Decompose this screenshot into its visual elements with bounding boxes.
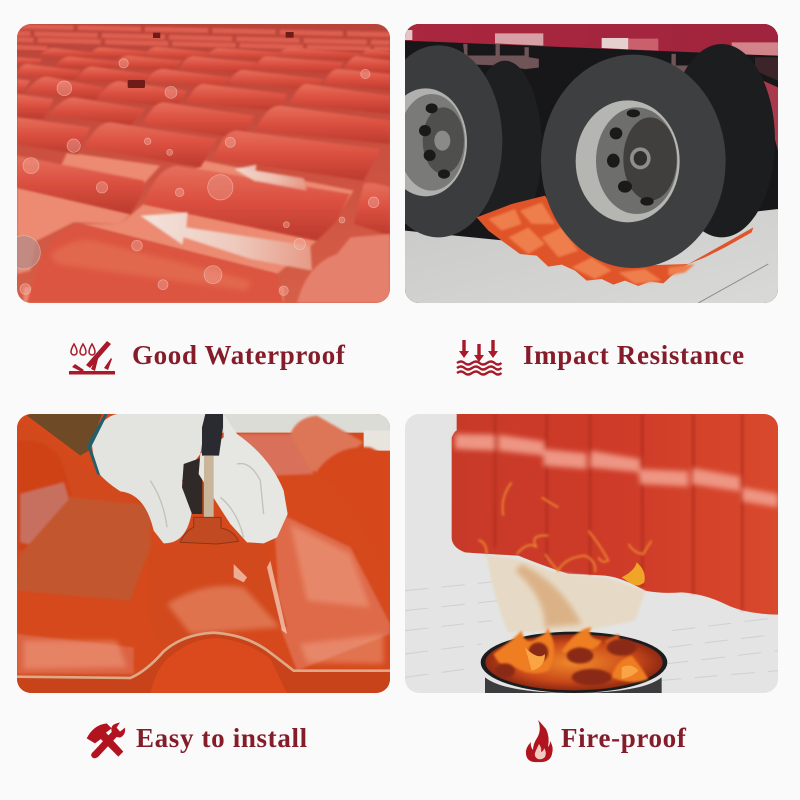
rear tyres — [493, 60, 520, 68]
crushed roof sheet — [477, 196, 753, 286]
ridge screws — [128, 32, 294, 88]
concrete floor — [405, 209, 778, 303]
bottom barrel tile — [27, 224, 284, 303]
icon: hammer and wrench — [87, 722, 125, 758]
light flat tile channels — [17, 152, 354, 303]
burning barrel — [481, 624, 667, 693]
roof tile barrels — [17, 47, 390, 241]
glossy speckle patches — [24, 524, 384, 669]
floor lines — [405, 581, 778, 681]
far tile rows — [0, 26, 390, 49]
water drops — [7, 59, 379, 295]
icon: flame — [526, 720, 553, 762]
left tyre — [405, 46, 502, 238]
label: Easy to install: Easy to install — [136, 723, 308, 753]
panel: waterproof roof photo — [0, 24, 390, 303]
roof surfaces — [17, 416, 390, 674]
label: Impact Resistance: Impact Resistance — [523, 340, 745, 370]
background wall — [204, 414, 390, 433]
red roof sheet — [452, 414, 778, 615]
cut tile edge and lower tile — [17, 634, 390, 693]
chassis brackets — [463, 44, 688, 72]
panel: fire-proof photo — [405, 414, 778, 693]
flames on sheet — [478, 482, 652, 572]
panel: impact resistance truck photo — [374, 24, 778, 303]
bottom right light tile — [297, 234, 390, 303]
icon: arrows over waves — [457, 340, 502, 374]
right tyre — [541, 55, 726, 268]
forearm — [27, 414, 102, 456]
flames in barrel — [493, 624, 648, 682]
glove hand — [87, 414, 288, 543]
label: Fire-proof: Fire-proof — [561, 723, 687, 753]
water flow arrows — [140, 165, 312, 271]
label: Good Waterproof: Good Waterproof — [132, 340, 346, 370]
cloth and smoke — [487, 556, 645, 632]
screwdriver — [202, 414, 223, 521]
panel: easy install photo — [17, 414, 390, 693]
screw washer — [180, 517, 239, 544]
truck chassis — [405, 24, 778, 151]
icon: water drops on surface — [69, 341, 115, 374]
